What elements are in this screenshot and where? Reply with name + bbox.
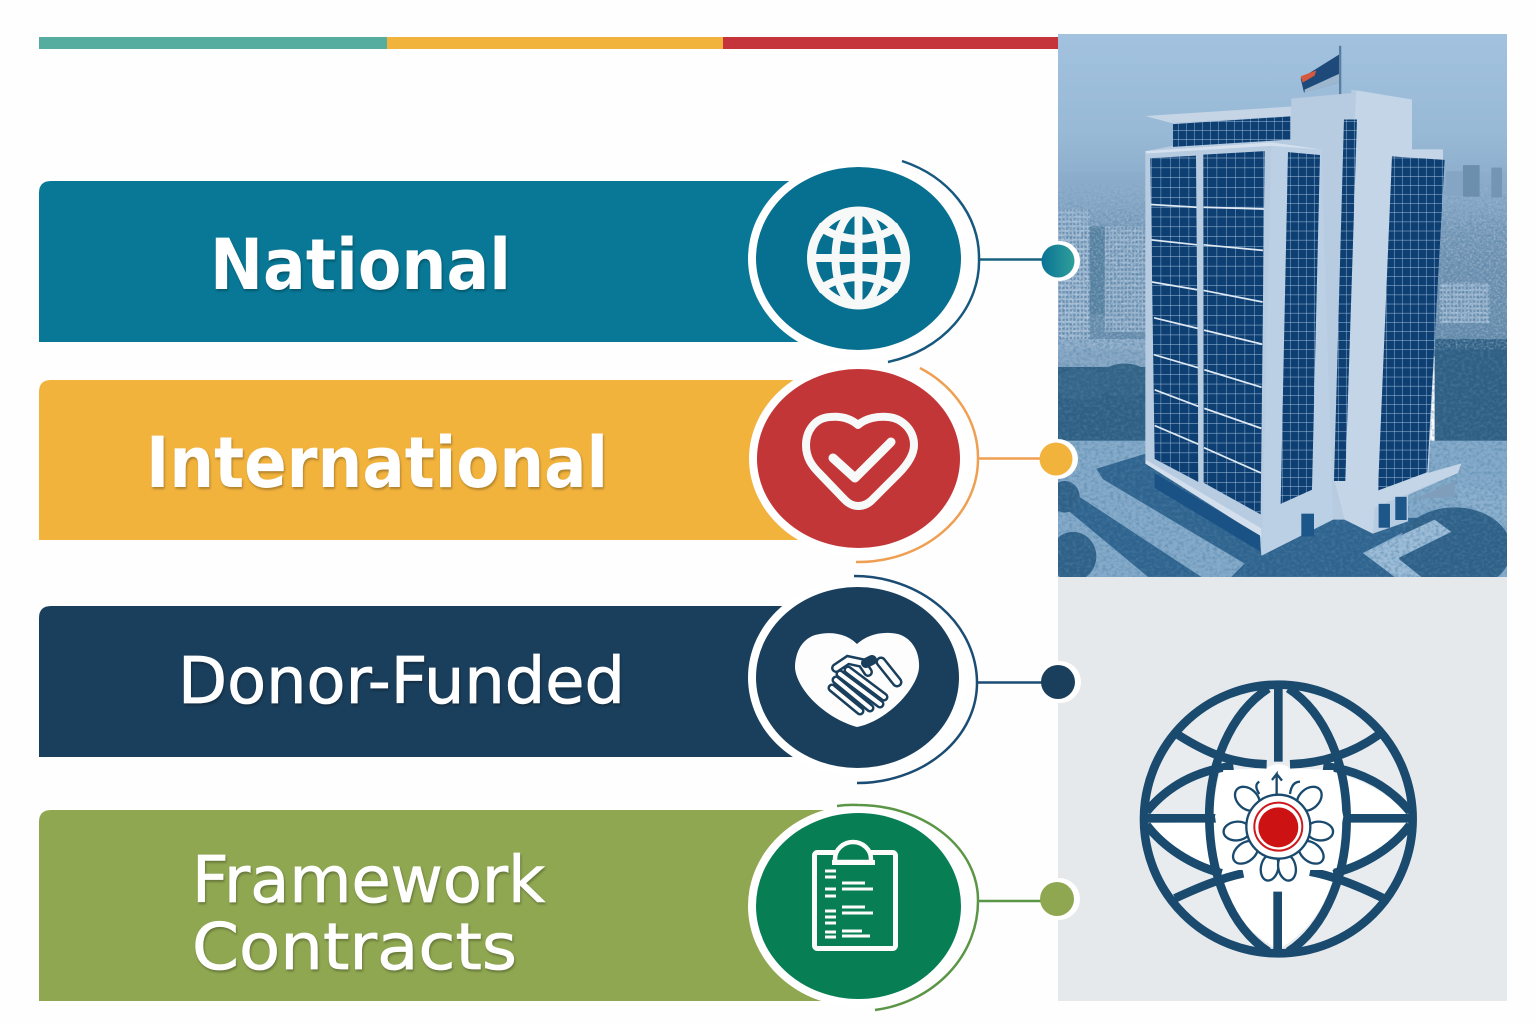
icon: globe [811,210,906,306]
bar: Donor-Funded [39,606,860,757]
connector: National [980,241,1080,281]
building: narrow central glass strip [1334,120,1357,481]
building: tower body [1145,90,1461,555]
heading: International: International [146,422,608,504]
emblem: petals and red sun [1215,770,1343,882]
heading: National: National [210,224,511,306]
panel: building photo [1050,30,1511,592]
icon: globe with red emblem [1144,685,1413,953]
building: flag [1301,46,1341,95]
connector: International [978,439,1078,479]
badge: Framework Contracts clipboard [748,805,978,1010]
panel: grey logo background [1058,577,1507,1001]
badge: International heart [749,361,978,562]
icon: heart with check mark [806,417,914,506]
icon: clipboard [814,842,896,948]
bar: National [39,181,860,342]
heading: Framework Contracts: Contracts [192,911,517,985]
connector: Donor-Funded [978,661,1081,703]
badge: Donor-Funded handshake [748,576,977,783]
building: left glass facade [1150,156,1199,482]
building: right glass facade [1378,156,1445,491]
top tricolour accent bar [39,37,1058,49]
heading: Donor-Funded: Donor-Funded [178,645,625,719]
building: side glass facade [1281,152,1320,504]
bar: Framework Contracts [39,810,860,1001]
bar: International [39,380,860,540]
heading: Framework Contracts [192,844,545,985]
icon: heart with handshake [795,633,919,727]
heading: Framework Contracts: Framework [192,844,545,918]
badge: National globe [748,159,979,362]
connector: Framework Contracts [979,878,1080,920]
building: centre-left glass facade [1203,151,1265,514]
